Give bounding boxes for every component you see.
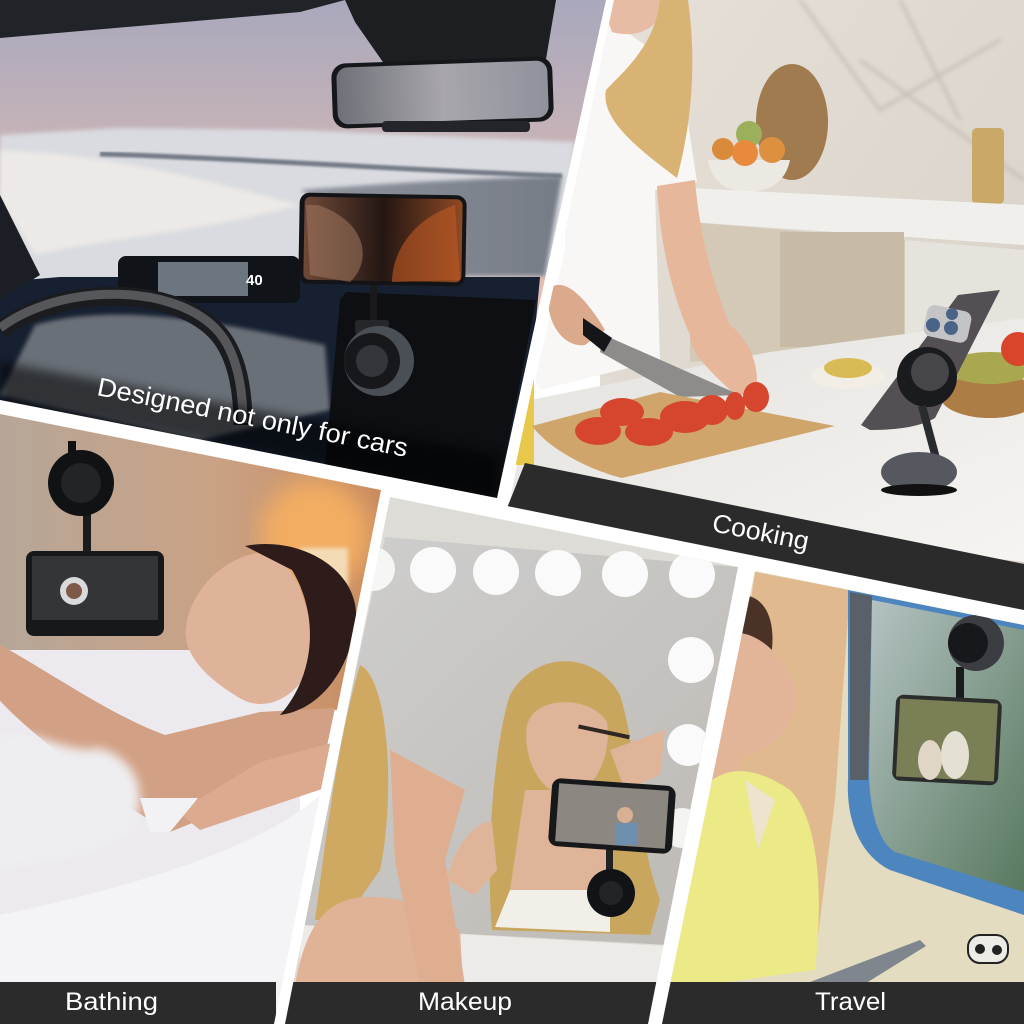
caption band: [0, 362, 500, 500]
phone mount on dash: [344, 282, 414, 396]
caption: makeup: Makeup: [418, 988, 512, 1016]
marble counter: [510, 318, 1024, 562]
caption: bathing: Bathing: [65, 988, 158, 1016]
knife: [583, 318, 740, 397]
tablet: [700, 940, 926, 1024]
foreground woman: [296, 665, 465, 982]
woman: [670, 595, 819, 990]
caption band: [0, 982, 276, 1024]
cutting board on wall: [756, 64, 828, 180]
caption band: [660, 982, 1024, 1024]
jar: [972, 128, 1004, 204]
caption: travel: Travel: [815, 988, 886, 1016]
black mount panel: [325, 292, 536, 498]
foam: [30, 729, 146, 816]
panel: car: [0, 0, 610, 500]
instrument cluster: [118, 256, 300, 303]
caption: cars: Designed not only for cars: [95, 371, 411, 463]
caption band: [507, 463, 1024, 612]
worktop back and cabinets: [690, 188, 1024, 245]
snowy landscape: [0, 128, 575, 285]
wall socket: [968, 935, 1008, 963]
reflection of woman: [447, 661, 665, 935]
phone with mount: [892, 615, 1004, 786]
panel: makeup: [280, 490, 750, 1024]
caption: cooking: Cooking: [710, 507, 812, 556]
phone mount on wall: [26, 441, 164, 636]
steering wheel: [0, 296, 243, 425]
visor header: [0, 0, 345, 38]
fruit bowl: [708, 121, 790, 192]
salad plate: [811, 332, 1024, 418]
cutting board with tomatoes: [532, 382, 835, 478]
phone: [298, 193, 467, 286]
yellow object: [516, 380, 534, 465]
dashboard: [0, 277, 540, 498]
instrument cluster: 40: [246, 272, 263, 289]
rear-view mirror: [331, 56, 554, 132]
woman: [0, 544, 356, 832]
phone with mount: [548, 778, 676, 917]
person: [535, 0, 757, 395]
tub: [0, 650, 300, 915]
mirror bulbs: [351, 547, 715, 848]
panel: bathing: [0, 410, 385, 1024]
caption band: [280, 982, 660, 1024]
phone stand: [861, 290, 1000, 496]
panel: kitchen: [507, 0, 1024, 620]
counter: [300, 925, 663, 982]
panel: travel: [660, 565, 1024, 1024]
candle: [300, 548, 348, 586]
train window: [848, 590, 1024, 915]
